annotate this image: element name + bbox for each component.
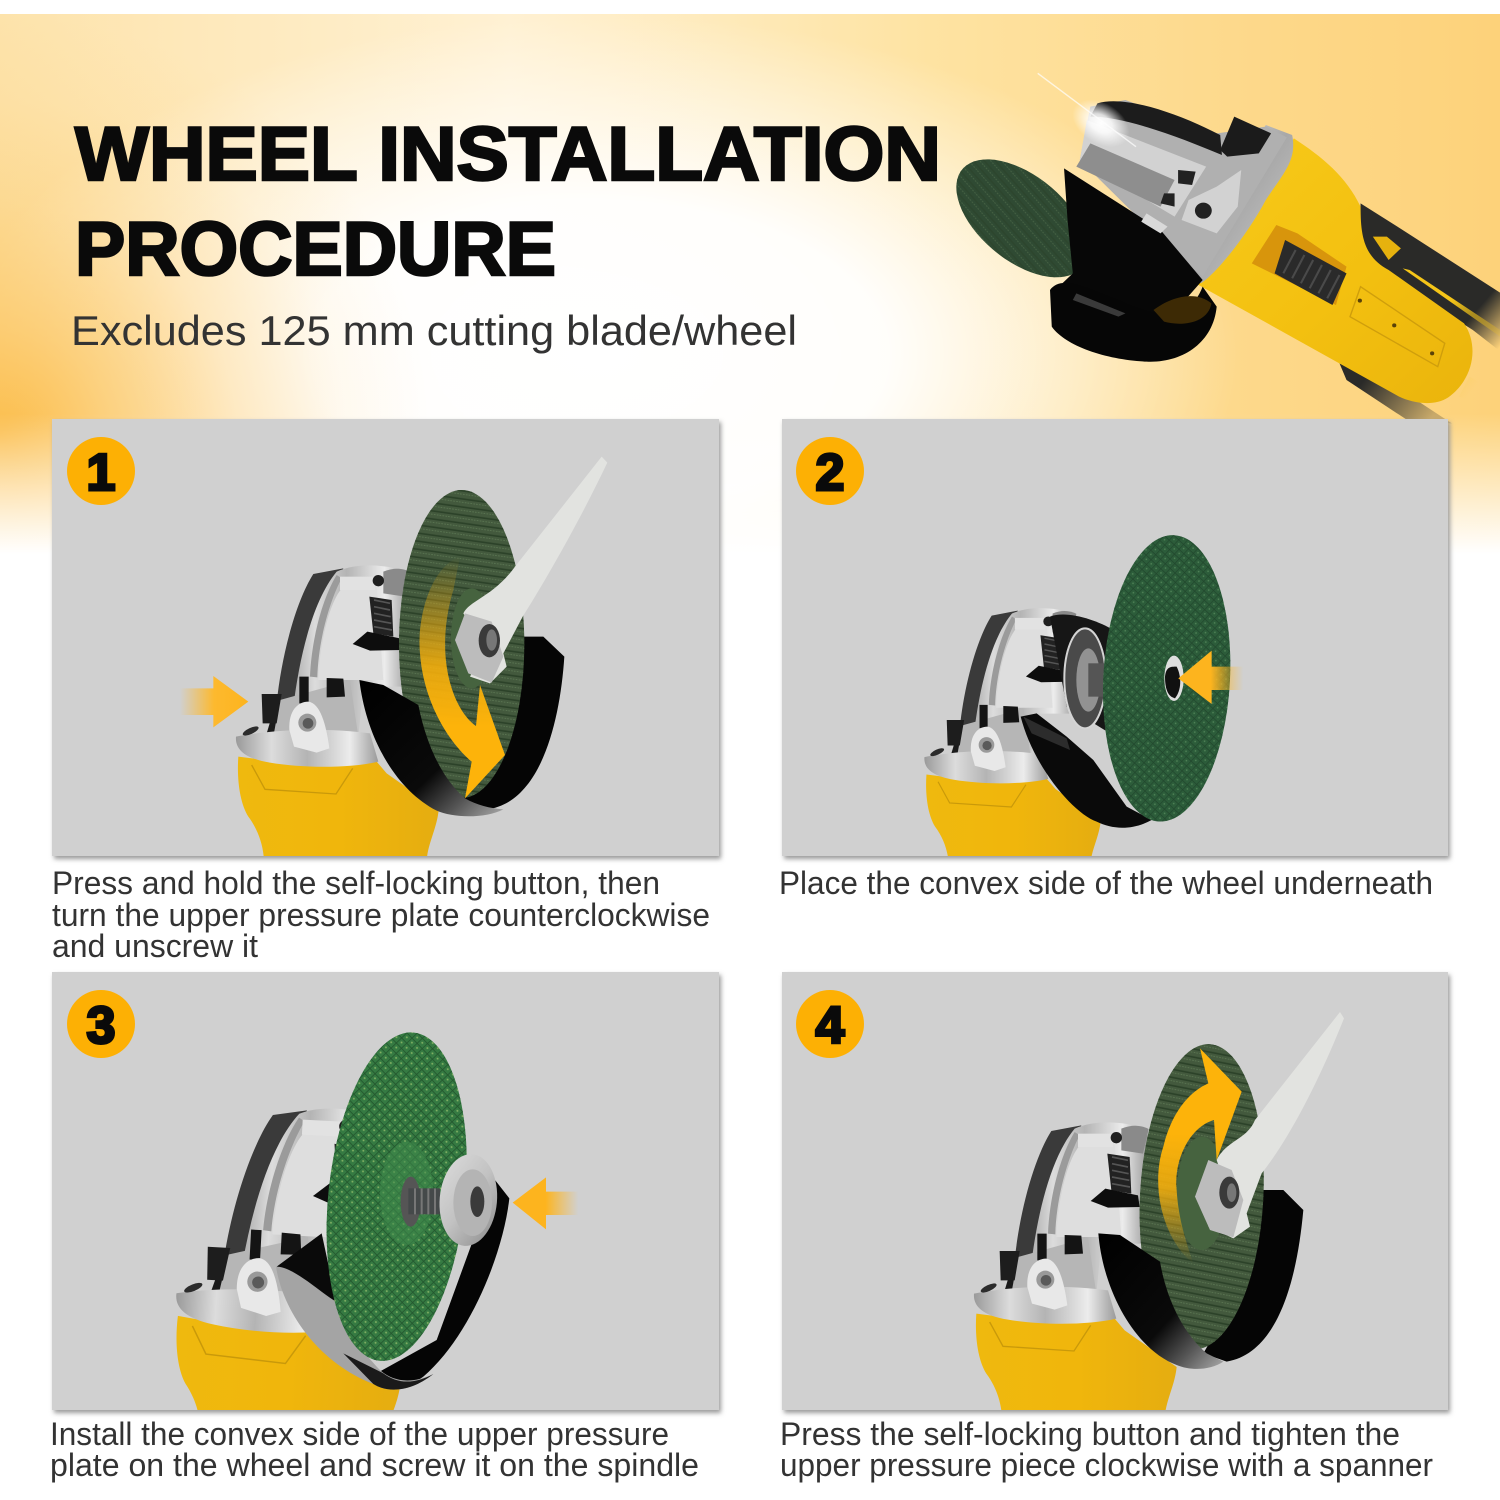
caption: step 2: Place the convex side of the wheel underneath	[779, 865, 1433, 901]
arrow: place wheel	[1178, 651, 1243, 704]
caption: step 3: plate on the wheel and screw it on the spindle	[50, 1447, 699, 1483]
subtitle: Excludes 125 mm cutting blade/wheel	[71, 307, 797, 354]
caption: step 1	[52, 865, 710, 964]
grinder with spanner tightening wheel	[974, 1012, 1344, 1420]
arrow: wheel rotation	[419, 557, 505, 798]
caption: step 1: and unscrew it	[52, 928, 258, 964]
caption: step 3	[50, 1416, 699, 1483]
number badge 3: 3	[87, 997, 115, 1055]
arrow: tighten clockwise	[1158, 1048, 1242, 1263]
hero grinder illustration	[934, 73, 1500, 423]
number badge 4: 4	[816, 997, 845, 1055]
grinder with pressure plate and spindle	[176, 1032, 576, 1410]
caption: step 1: turn the upper pressure plate counterclockwise	[52, 897, 710, 933]
caption: step 4	[780, 1416, 1433, 1483]
number badge 4	[796, 990, 864, 1058]
title: PROCEDURE	[75, 207, 556, 292]
number badge 1	[67, 437, 135, 505]
panel: step 3	[52, 972, 721, 1447]
caption: step 3: Install the convex side of the upper pressure	[50, 1416, 669, 1452]
arrow: install plate	[513, 1177, 578, 1229]
number badge 1: 1	[87, 444, 115, 502]
title: WHEEL INSTALLATION	[75, 112, 941, 197]
panel: step 4	[782, 972, 1450, 1420]
grinder with wheel placed on spindle	[924, 532, 1243, 867]
number badge 2: 2	[816, 444, 844, 502]
caption: step 1: Press and hold the self-locking button, then	[52, 865, 660, 901]
grinder with spanner loosening wheel	[180, 457, 607, 863]
panel: step 1	[52, 419, 721, 863]
arrow: press button	[180, 676, 248, 727]
number badge 2	[796, 437, 864, 505]
title	[75, 112, 941, 292]
number badge 3	[67, 990, 135, 1058]
panel: step 2	[782, 419, 1450, 867]
background gradient	[0, 14, 1500, 554]
caption: step 4: Press the self-locking button and tighten the	[780, 1416, 1400, 1452]
caption: step 4: upper pressure piece clockwise with a spanner	[780, 1447, 1433, 1483]
